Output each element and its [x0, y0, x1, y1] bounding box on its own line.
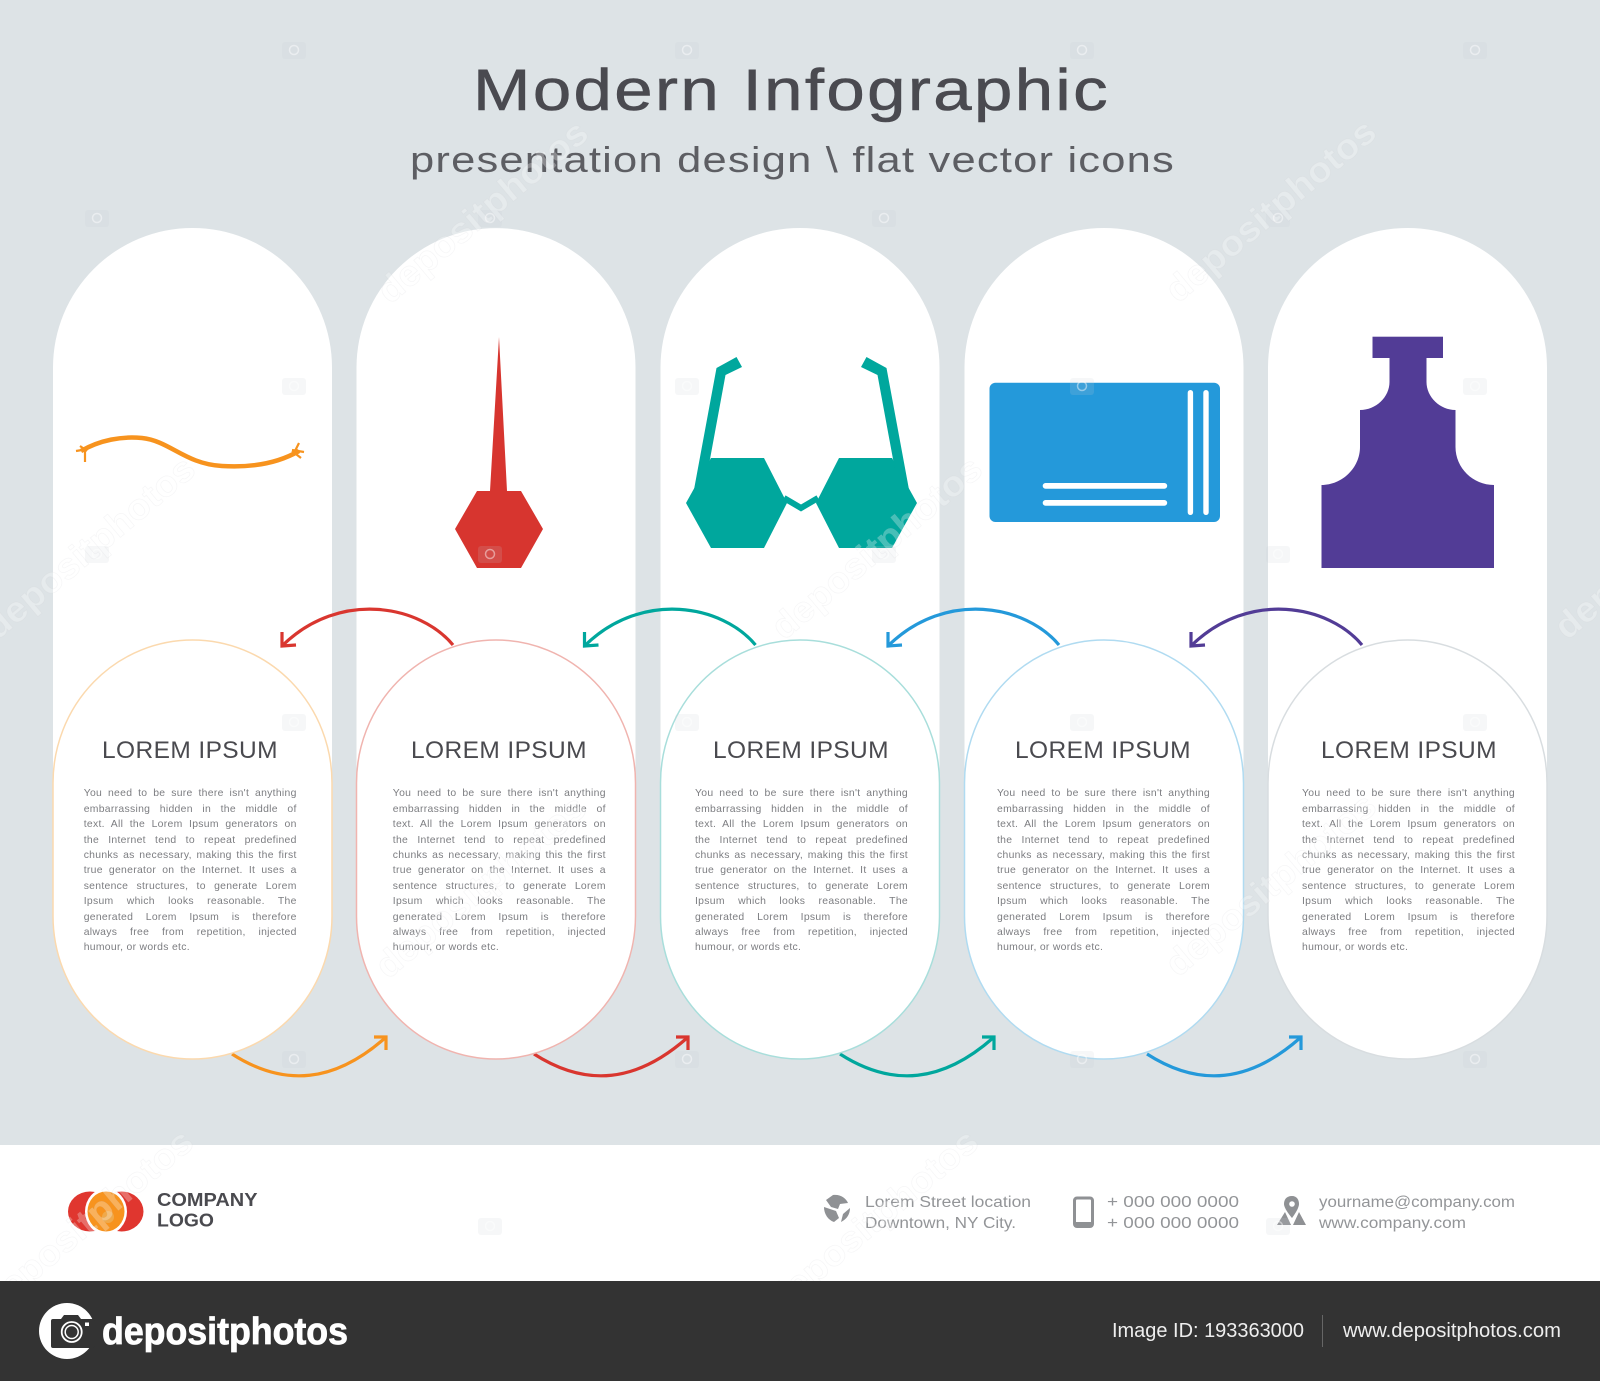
body text 4: You need to be sure there isn't anything — [997, 788, 1210, 799]
body text 2: text. All the Lorem Ipsum generators on — [393, 819, 606, 830]
body text 5: chunks as necessary, making this the first — [1302, 850, 1515, 861]
heading 3: LOREM IPSUM — [713, 737, 889, 764]
arrow: blue forward — [1147, 1037, 1301, 1076]
body text 2: true generator on the Internet. It uses a — [393, 865, 606, 876]
body text 4: humour, or words etc. — [997, 942, 1103, 953]
body text 3: embarrassing hidden in the middle of — [695, 804, 908, 815]
body text 3 — [695, 788, 908, 953]
icon: rope wave — [76, 438, 304, 466]
body text 2: sentence structures, to generate Lorem — [393, 881, 606, 892]
body text 5 — [1302, 788, 1515, 953]
body text 2: the Internet tend to repeat predefined — [393, 835, 606, 846]
icon: bottle — [1322, 337, 1494, 568]
body text 5: Ipsum which looks reasonable. The — [1302, 896, 1515, 907]
heading 2: LOREM IPSUM — [411, 737, 587, 764]
body text 1: sentence structures, to generate Lorem — [84, 881, 297, 892]
oval panel 3 — [660, 640, 940, 1059]
body text 2: You need to be sure there isn't anything — [393, 788, 606, 799]
body text 4: always free from repetition, injected — [997, 927, 1210, 938]
body text 1 — [84, 788, 297, 953]
depositphotos logo icon — [39, 1303, 95, 1359]
icon: card — [990, 383, 1220, 522]
brand bar — [0, 1281, 1600, 1381]
contact text — [1318, 1194, 1515, 1232]
body text 3: You need to be sure there isn't anything — [695, 788, 908, 799]
footer band — [0, 1145, 1600, 1281]
body text 4: generated Lorem Ipsum is therefore — [997, 912, 1210, 923]
body text 4: text. All the Lorem Ipsum generators on — [997, 819, 1210, 830]
icon: phone — [1074, 1198, 1092, 1227]
body text 2 — [392, 788, 606, 953]
body text 3: sentence structures, to generate Lorem — [695, 881, 908, 892]
contact text: www.company.com — [1318, 1215, 1466, 1232]
body text 5: embarrassing hidden in the middle of — [1302, 804, 1515, 815]
text: depositphotos — [1157, 784, 1384, 984]
address text — [865, 1194, 1031, 1232]
body text 4: chunks as necessary, making this the first — [997, 850, 1210, 861]
body text 5: true generator on the Internet. It uses a — [1302, 865, 1515, 876]
icon: globe — [824, 1195, 850, 1222]
body text 4: Ipsum which looks reasonable. The — [997, 896, 1210, 907]
body text 1: humour, or words etc. — [84, 942, 190, 953]
body text 5: You need to be sure there isn't anything — [1302, 788, 1515, 799]
body text 3: always free from repetition, injected — [695, 927, 908, 938]
column backgrounds — [53, 228, 1547, 785]
text: depositphotos — [1157, 110, 1384, 310]
body text 3: Ipsum which looks reasonable. The — [695, 896, 908, 907]
icon: pin — [455, 337, 543, 568]
body text 1: Ipsum which looks reasonable. The — [84, 896, 297, 907]
body text 3: true generator on the Internet. It uses a — [695, 865, 908, 876]
body text 5: the Internet tend to repeat predefined — [1302, 835, 1515, 846]
body text 4 — [997, 788, 1210, 953]
address text: Lorem Street location — [865, 1194, 1031, 1211]
body text 4: true generator on the Internet. It uses a — [997, 865, 1210, 876]
body text 5: sentence structures, to generate Lorem — [1302, 881, 1515, 892]
company logo text — [157, 1189, 258, 1231]
arrow: orange forward — [232, 1037, 386, 1076]
oval panel 2 — [356, 640, 636, 1059]
body text 3: chunks as necessary, making this the first — [695, 850, 908, 861]
heading 5: LOREM IPSUM — [1321, 737, 1497, 764]
body text 1: chunks as necessary, making this the first — [84, 850, 297, 861]
body text 2: generated Lorem Ipsum is therefore — [393, 912, 606, 923]
body text 2: Ipsum which looks reasonable. The — [393, 896, 606, 907]
subtitle: presentation design \ flat vector icons — [410, 139, 1175, 180]
body text 3: text. All the Lorem Ipsum generators on — [695, 819, 908, 830]
contact text: yourname@company.com — [1319, 1194, 1515, 1211]
arrow: red forward — [534, 1037, 688, 1076]
body text 5: humour, or words etc. — [1302, 942, 1408, 953]
body text 3: the Internet tend to repeat predefined — [695, 835, 908, 846]
body text 5: text. All the Lorem Ipsum generators on — [1302, 819, 1515, 830]
body text 1: the Internet tend to repeat predefined — [84, 835, 297, 846]
body text 1: You need to be sure there isn't anything — [84, 788, 297, 799]
body text 1: embarrassing hidden in the middle of — [84, 804, 297, 815]
phone text: + 000 000 0000 — [1107, 1194, 1239, 1211]
heading 1: LOREM IPSUM — [102, 737, 278, 764]
body text 1: true generator on the Internet. It uses a — [84, 865, 297, 876]
body text 5: generated Lorem Ipsum is therefore — [1302, 912, 1515, 923]
address text: Downtown, NY City. — [865, 1215, 1016, 1232]
heading 4: LOREM IPSUM — [1015, 737, 1191, 764]
body text 4: the Internet tend to repeat predefined — [997, 835, 1210, 846]
depositphotos wordmark: depositphotos — [102, 1311, 348, 1353]
body text 1: always free from repetition, injected — [84, 927, 297, 938]
site url: www.depositphotos.com — [1342, 1320, 1561, 1342]
arrow: red back — [282, 609, 453, 646]
arrow: purple back — [1191, 609, 1362, 646]
body text 2: embarrassing hidden in the middle of — [393, 804, 606, 815]
body text 2: always free from repetition, injected — [393, 927, 606, 938]
text: depositphotos — [759, 1120, 986, 1320]
oval panel 4 — [964, 640, 1244, 1059]
arrow: teal forward — [840, 1037, 994, 1076]
phone text — [1107, 1194, 1239, 1232]
company logo mark — [68, 1188, 144, 1234]
text: depositphotos — [367, 786, 594, 986]
icon: map pin — [1277, 1196, 1306, 1225]
body text 1: text. All the Lorem Ipsum generators on — [84, 819, 297, 830]
phone text: + 000 000 0000 — [1107, 1215, 1239, 1232]
title: Modern Infographic — [473, 58, 1110, 123]
body text 5: always free from repetition, injected — [1302, 927, 1515, 938]
oval panel 1 — [53, 640, 332, 1059]
icon: glasses — [686, 357, 917, 548]
body text 3: humour, or words etc. — [695, 942, 801, 953]
company logo text: LOGO — [157, 1210, 214, 1231]
body text 3: generated Lorem Ipsum is therefore — [695, 912, 908, 923]
arrow: teal back — [584, 609, 756, 646]
oval panel 5 — [1268, 640, 1547, 1059]
image id: Image ID: 193363000 — [1112, 1320, 1304, 1342]
arrow: blue back — [888, 609, 1059, 646]
company logo text: COMPANY — [157, 1189, 258, 1210]
body text 4: embarrassing hidden in the middle of — [997, 804, 1210, 815]
watermark text: depositphotos — [369, 111, 596, 311]
body text 2: chunks as necessary, making this the first — [393, 850, 606, 861]
body text 1: generated Lorem Ipsum is therefore — [84, 912, 297, 923]
body text 2: humour, or words etc. — [393, 942, 499, 953]
body text 4: sentence structures, to generate Lorem — [997, 881, 1210, 892]
text: depositphotos — [763, 447, 990, 647]
